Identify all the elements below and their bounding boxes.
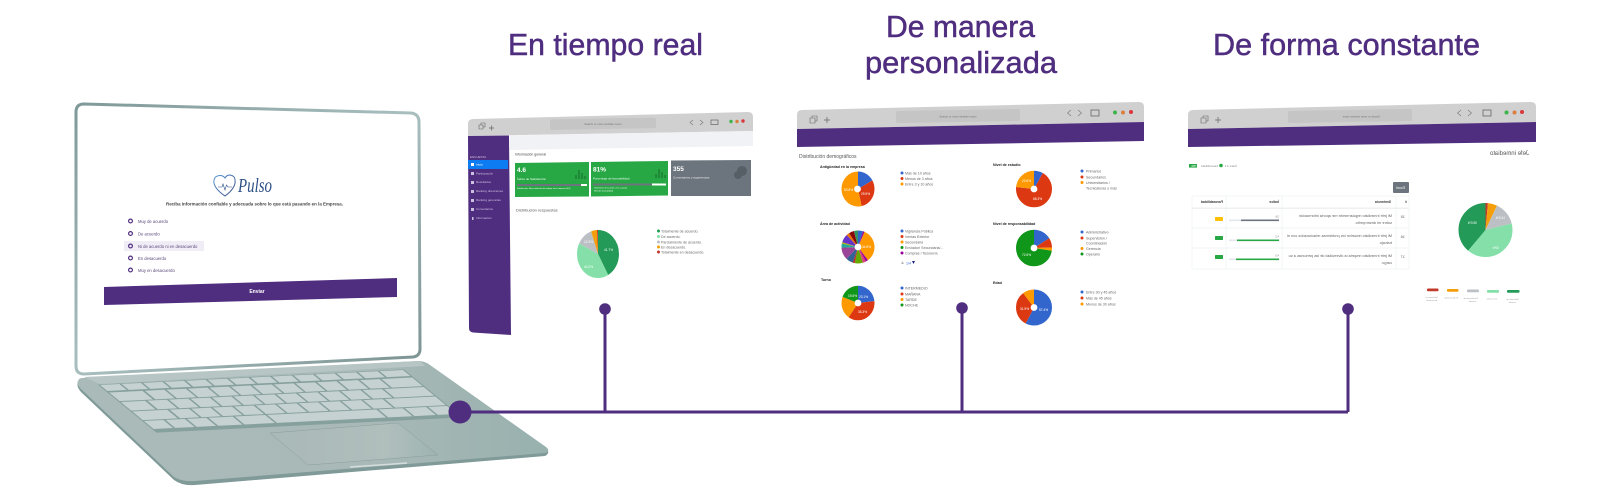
- connector dot: tiempo real: [599, 303, 611, 315]
- row 16: 16: [1401, 234, 1405, 239]
- light header strip: [510, 131, 753, 150]
- options list: De acuerdo: [138, 232, 160, 236]
- pie chart: respuestas: 41.7%: [604, 248, 613, 252]
- sidebar: Resultados: [476, 180, 492, 184]
- table: sentencias: Favorabilidad: [1201, 200, 1223, 204]
- title: En tiempo real: En tiempo real: [508, 27, 703, 62]
- pie: área de actividad: 1/4: [906, 262, 911, 266]
- pie: turno: NOCHE: [905, 303, 919, 307]
- connector dot: personalizada: [956, 302, 968, 314]
- row 16: Mi jefe inmediato resuelve los problemas relacionados con el: [1287, 233, 1392, 238]
- heading: jefe inmediato: Jefe inmediato: [1489, 151, 1529, 157]
- title: De manera personalizada: personalizada: [865, 45, 1058, 80]
- legend: respuestas: Totalmente en desacuerdo.: [661, 250, 704, 254]
- pie: turno: 19.6%: [848, 294, 857, 298]
- button: Excel: Excel: [1396, 186, 1405, 190]
- pie chart: jefe inmediato: 40%: [1492, 246, 1499, 250]
- pie: nivel de responsabilidad: [993, 222, 1109, 257]
- row 17: cargo.: [1381, 260, 1392, 265]
- pie: antigüedad: 29.5%: [861, 192, 870, 196]
- pie chart: jefe inmediato: 39.0%: [1468, 221, 1477, 225]
- heading: distribución demográficos: Distribución demográficos: [799, 154, 857, 160]
- legend: respuestas: Totalmente de acuerdo.: [661, 229, 699, 233]
- button: Excel: [1393, 182, 1409, 193]
- legend: respuestas: [657, 229, 704, 254]
- survey statement: Reciba información confiable y adecuada sobre lo que está pasando en la Empresa.: [166, 202, 343, 206]
- legend: jefe inmediato: Totalmente de: [1506, 298, 1519, 301]
- laptop: [76, 104, 548, 485]
- sidebar: Ranking direcciones: [476, 189, 504, 193]
- row 15: sobre mi desempeño.: [1355, 220, 1392, 225]
- card: índice de satisfacción: 4.6: [517, 167, 526, 174]
- logo: Pulso heart: Pulso: [237, 175, 272, 197]
- pie chart: respuestas: [584, 240, 613, 269]
- pie: nivel de responsabilidad: Gerencia: [1086, 247, 1101, 251]
- pie: nivel de estudio: 68.3%: [1033, 197, 1042, 201]
- table: sentencias: #: [1405, 200, 1407, 204]
- pie chart: respuestas: 40.2%: [584, 265, 593, 269]
- panel: jefe inmediato dashboard (mirrored): [1188, 102, 1536, 304]
- card: porcentaje de favorabilidad: Porcentaje de favorabilidad: [593, 176, 630, 180]
- legend: jefe inmediato: De acuerdo: [1486, 298, 1497, 300]
- row 15: 15: [1401, 214, 1405, 219]
- pie: área de actividad: Vigilancia Pública: [905, 229, 933, 233]
- pie: área de actividad: Secundaria: [905, 240, 923, 244]
- pie: edad: Más de 45 años: [1086, 296, 1112, 300]
- legend: jefe inmediato: acuerdo: [1508, 302, 1516, 304]
- pie: antigüedad: Entre 3 y 10 años: [905, 182, 933, 186]
- pie: antigüedad: [820, 165, 933, 198]
- title: De manera personalizada: [865, 9, 1058, 80]
- connector dot: laptop: [448, 400, 472, 424]
- row 15: 3.6: [1275, 214, 1279, 218]
- pie: antigüedad: Antigüedad en la empresa: [820, 165, 866, 169]
- pie: área de actividad: Ventas Exterior: [905, 235, 930, 239]
- page background: [468, 131, 754, 338]
- legend: respuestas: En desacuerdo.: [661, 245, 686, 249]
- purple header band: [1188, 122, 1536, 147]
- pie: edad: 57.4%: [1039, 308, 1048, 312]
- legend: jefe inmediato: desacuerdo: [1426, 300, 1437, 302]
- trackpad: [270, 423, 438, 465]
- card: índice de satisfacción: Satisfacción: Muy satisfecho de trabajar en la empresa (4.6): [517, 187, 571, 190]
- row 16: [1215, 233, 1405, 245]
- sidebar: Comentarios: [476, 207, 494, 211]
- pie: área de actividad: 34.6%: [862, 245, 871, 249]
- connector lines: [460, 308, 1348, 412]
- pie: turno: Turno: [821, 278, 832, 282]
- summary: favorabilidad e índice: 78%: [1191, 164, 1196, 168]
- pie: nivel de estudio: [993, 163, 1117, 201]
- heading: distribución respuestas: Distribución respuestas: [516, 208, 558, 212]
- pie: nivel de responsabilidad: Coordinación: [1086, 241, 1107, 245]
- card: porcentaje de favorabilidad: 81%: [593, 166, 606, 174]
- legend: respuestas: Parcialmente de acuerdo.: [661, 240, 702, 244]
- card: comentarios y sugerencias: 355: [673, 166, 684, 173]
- pie: nivel de responsabilidad: 72.6%: [1022, 253, 1031, 257]
- row 17: 17: [1401, 254, 1405, 259]
- pie: edad: 31.9%: [1020, 307, 1029, 311]
- browser toolbar: [468, 112, 753, 136]
- pie: edad: Menos de 30 años: [1086, 302, 1116, 306]
- options list: Muy de acuerdo: [138, 219, 169, 224]
- connector dot: constante: [1342, 303, 1354, 315]
- pie: área de actividad: [820, 221, 943, 266]
- pie chart: respuestas: 12.3%: [584, 240, 593, 244]
- sidebar: Ranking gerencias: [476, 198, 501, 202]
- purple header band: [797, 122, 1144, 147]
- pie chart: jefe inmediato: 14.0%: [1496, 216, 1505, 220]
- pie: nivel de estudio: Nivel de estudio: [993, 163, 1021, 167]
- card: comentarios y sugerencias: Comentarios y sugerencias: [673, 176, 710, 180]
- title: De forma constante: De forma constante: [1213, 27, 1480, 62]
- pie: nivel de responsabilidad: Nivel de responsabilidad: [993, 222, 1035, 226]
- laptop lid and screen: [76, 104, 420, 374]
- options list: [129, 219, 198, 273]
- pie: antigüedad: Menos de 3 años: [905, 177, 933, 181]
- submit button: Enviar: [249, 289, 265, 295]
- panel: tiempo real dashboard: [468, 112, 754, 338]
- sidebar: Información: [476, 216, 492, 220]
- pie: turno: TARDE: [905, 298, 918, 302]
- pie: turno: MAÑANA: [905, 291, 921, 296]
- pie: edad: [993, 281, 1116, 316]
- summary: favorabilidad e índice: [1189, 164, 1237, 168]
- sidebar: Participación: [476, 172, 494, 176]
- title: De manera personalizada: De manera: [886, 9, 1036, 44]
- pie: antigüedad: Más de 10 años: [905, 171, 931, 175]
- card: porcentaje de favorabilidad: Nivel de favorabilidad: [594, 190, 613, 192]
- browser toolbar: Search or enter website name: [584, 122, 622, 126]
- row 17: 4.3: [1275, 254, 1279, 258]
- card: porcentaje de favorabilidad: [591, 161, 668, 196]
- highlighted option background: [124, 241, 204, 251]
- legend: jefe inmediato: Totalmente en: [1425, 296, 1438, 299]
- laptop base: [77, 361, 548, 485]
- browser toolbar: Search or enter website name: [939, 114, 977, 118]
- pie: turno: 36.3%: [858, 310, 867, 314]
- legend: jefe inmediato: [1425, 288, 1520, 304]
- row 17: Mi jefe inmediato respeta la diversidad de las personas a su: [1289, 253, 1392, 258]
- options list: Muy en desacuerdo: [138, 268, 175, 273]
- legend: jefe inmediato: Parcialmente de: [1463, 297, 1478, 300]
- card: porcentaje de favorabilidad: Totalmente de acuerdo + De acuerdo: [594, 186, 628, 190]
- pie: edad: Edad: [993, 281, 1002, 285]
- screen content: [104, 175, 397, 305]
- keyboard: [98, 369, 462, 433]
- logo: Pulso heart: [214, 175, 272, 197]
- browser toolbar: [1188, 102, 1536, 129]
- sidebar: [468, 136, 511, 335]
- table: sentencias: Índice: [1269, 199, 1279, 204]
- browser toolbar: Search or enter website name: [1342, 114, 1380, 118]
- pie: antigüedad: 53.8%: [844, 188, 853, 192]
- front notch: [350, 463, 407, 467]
- heading: información general: Información general: [515, 152, 546, 156]
- row 17: [1215, 253, 1405, 265]
- card: índice de satisfacción: Índice de Satisfacción: [517, 177, 547, 181]
- summary: favorabilidad e índice: Favorabilidad: [1201, 164, 1218, 168]
- pie chart: jefe inmediato: [1468, 216, 1505, 250]
- pie: nivel de estudio: Primarios: [1086, 169, 1101, 173]
- browser toolbar: [797, 102, 1144, 129]
- legend: jefe inmediato: En desacuerdo: [1444, 298, 1458, 300]
- submit button: [104, 278, 397, 305]
- sidebar: Inicio: [476, 162, 483, 166]
- summary: favorabilidad e índice: Índice 4.3: [1224, 164, 1237, 168]
- pie: nivel de estudio: Secundarios: [1086, 175, 1106, 179]
- row 16: 4.2: [1275, 234, 1279, 238]
- pie: nivel de estudio: 23.6%: [1022, 179, 1031, 183]
- pie: turno: INTERMEDIO: [905, 286, 928, 290]
- legend: respuestas: De acuerdo.: [661, 235, 681, 239]
- pie: turno: [821, 278, 928, 314]
- card: comentarios y sugerencias: [671, 160, 751, 196]
- pie: nivel de responsabilidad: Supervisión /: [1086, 236, 1107, 240]
- pie: nivel de responsabilidad: Operario: [1086, 252, 1100, 256]
- table: sentencias: Sentencia: [1375, 200, 1391, 204]
- table: sentencias: [1192, 196, 1409, 269]
- pie: nivel de responsabilidad: Administrativo: [1086, 230, 1109, 234]
- card: índice de satisfacción: [515, 162, 589, 197]
- pie: nivel de estudio: Universitarios /: [1086, 181, 1110, 185]
- options list: En desacuerdo: [138, 256, 167, 261]
- pie: área de actividad: Área de actividad: [820, 221, 850, 226]
- pie: edad: Entre 30 y 45 años: [1086, 290, 1116, 294]
- legend: jefe inmediato: acuerdo: [1468, 301, 1476, 303]
- sidebar: ENCUESTA: [470, 155, 486, 159]
- options list: Ni de acuerdo ni en desacuerdo: [138, 244, 198, 249]
- pie: nivel de estudio: Tecnicaturas o más: [1086, 186, 1117, 190]
- panel: demográficos dashboard: [797, 102, 1144, 316]
- pie: área de actividad: Compras / Tesorería: [905, 251, 938, 255]
- pie: área de actividad: Enviador/ Secundaria/...: [905, 246, 943, 250]
- row 15: Mi jefe inmediato regularmente me aporta información: [1299, 213, 1392, 218]
- pie: turno: 23.1%: [859, 295, 868, 299]
- row 15: [1215, 213, 1405, 225]
- row 16: trabajo.: [1379, 240, 1392, 245]
